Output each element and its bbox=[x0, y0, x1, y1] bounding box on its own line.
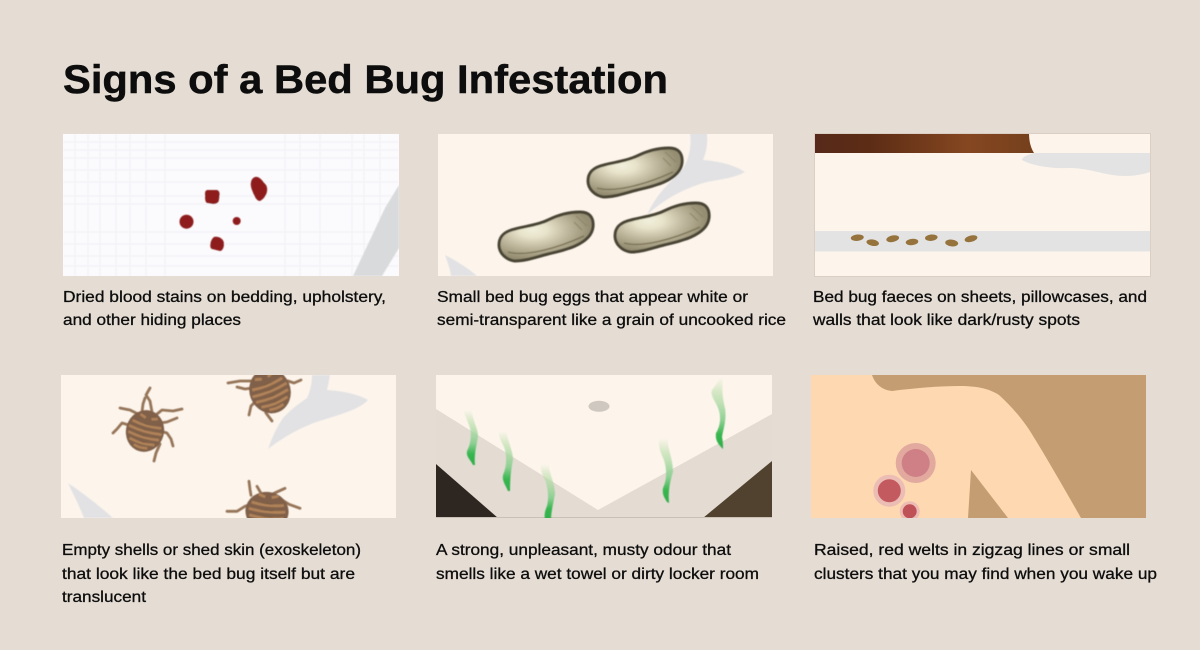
bug shell left bbox=[113, 388, 182, 461]
caption: Small bed bug eggs that appear white or bbox=[437, 289, 749, 306]
welt small bbox=[900, 501, 920, 518]
headboard bbox=[814, 133, 1034, 153]
welt large bbox=[896, 443, 936, 483]
caption bbox=[437, 289, 786, 329]
blood stain small bbox=[233, 217, 241, 225]
caption: Dried blood stains on bedding, upholstery, bbox=[63, 289, 386, 306]
blood stain left bbox=[180, 215, 194, 229]
egg left bbox=[499, 212, 593, 261]
panel: dried blood stains bbox=[63, 134, 399, 329]
illustration: stained fabric bbox=[63, 134, 399, 276]
seam stripe bbox=[814, 231, 1150, 252]
caption: semi-transparent like a grain of uncooked rice bbox=[437, 312, 786, 329]
caption: clusters that you may find when you wake up bbox=[814, 566, 1157, 583]
caption bbox=[63, 289, 386, 329]
blood stain large bbox=[251, 177, 267, 201]
blood stain bottom bbox=[210, 237, 224, 251]
caption: that look like the bed bug itself but are bbox=[62, 566, 355, 583]
caption: A strong, unpleasant, musty odour that bbox=[436, 542, 732, 559]
faecal spots bbox=[851, 234, 978, 247]
title: Signs of a Bed Bug Infestation bbox=[63, 58, 668, 102]
illustration: room corner with odour wisps bbox=[436, 375, 772, 520]
illustration: shoulder with welts bbox=[811, 375, 1146, 521]
shadow bbox=[1022, 153, 1150, 176]
egg right bbox=[615, 203, 709, 252]
illustration: eggs on sheet bbox=[438, 133, 773, 276]
caption: smells like a wet towel or dirty locker room bbox=[436, 566, 759, 583]
caption bbox=[814, 542, 1157, 583]
egg top bbox=[588, 148, 682, 197]
caption bbox=[436, 542, 759, 583]
ceiling light bbox=[588, 401, 610, 412]
panel: musty odour bbox=[436, 375, 772, 583]
panel: bed bug faeces bbox=[812, 133, 1150, 329]
bug shell top bbox=[226, 375, 303, 424]
panel: bed bug eggs bbox=[437, 133, 786, 329]
illustration: translucent bug shells bbox=[61, 375, 396, 518]
caption bbox=[62, 542, 361, 606]
bug shell bottom bbox=[225, 479, 302, 518]
welt medium bbox=[873, 475, 905, 507]
blood stain square bbox=[205, 190, 220, 204]
panel: red welts bbox=[811, 375, 1157, 583]
caption bbox=[812, 289, 1147, 329]
caption: Bed bug faeces on sheets, pillowcases, and bbox=[813, 289, 1147, 306]
odour wisps bbox=[463, 377, 726, 520]
caption: Empty shells or shed skin (exoskeleton) bbox=[62, 542, 361, 559]
illustration: mattress seam with spots bbox=[814, 133, 1150, 276]
caption: Raised, red welts in zigzag lines or small bbox=[814, 542, 1130, 559]
caption: and other hiding places bbox=[63, 312, 241, 329]
caption: walls that look like dark/rusty spots bbox=[812, 312, 1080, 329]
caption: translucent bbox=[62, 589, 147, 606]
skin bbox=[811, 375, 1081, 518]
panel: shed shells bbox=[61, 362, 396, 606]
